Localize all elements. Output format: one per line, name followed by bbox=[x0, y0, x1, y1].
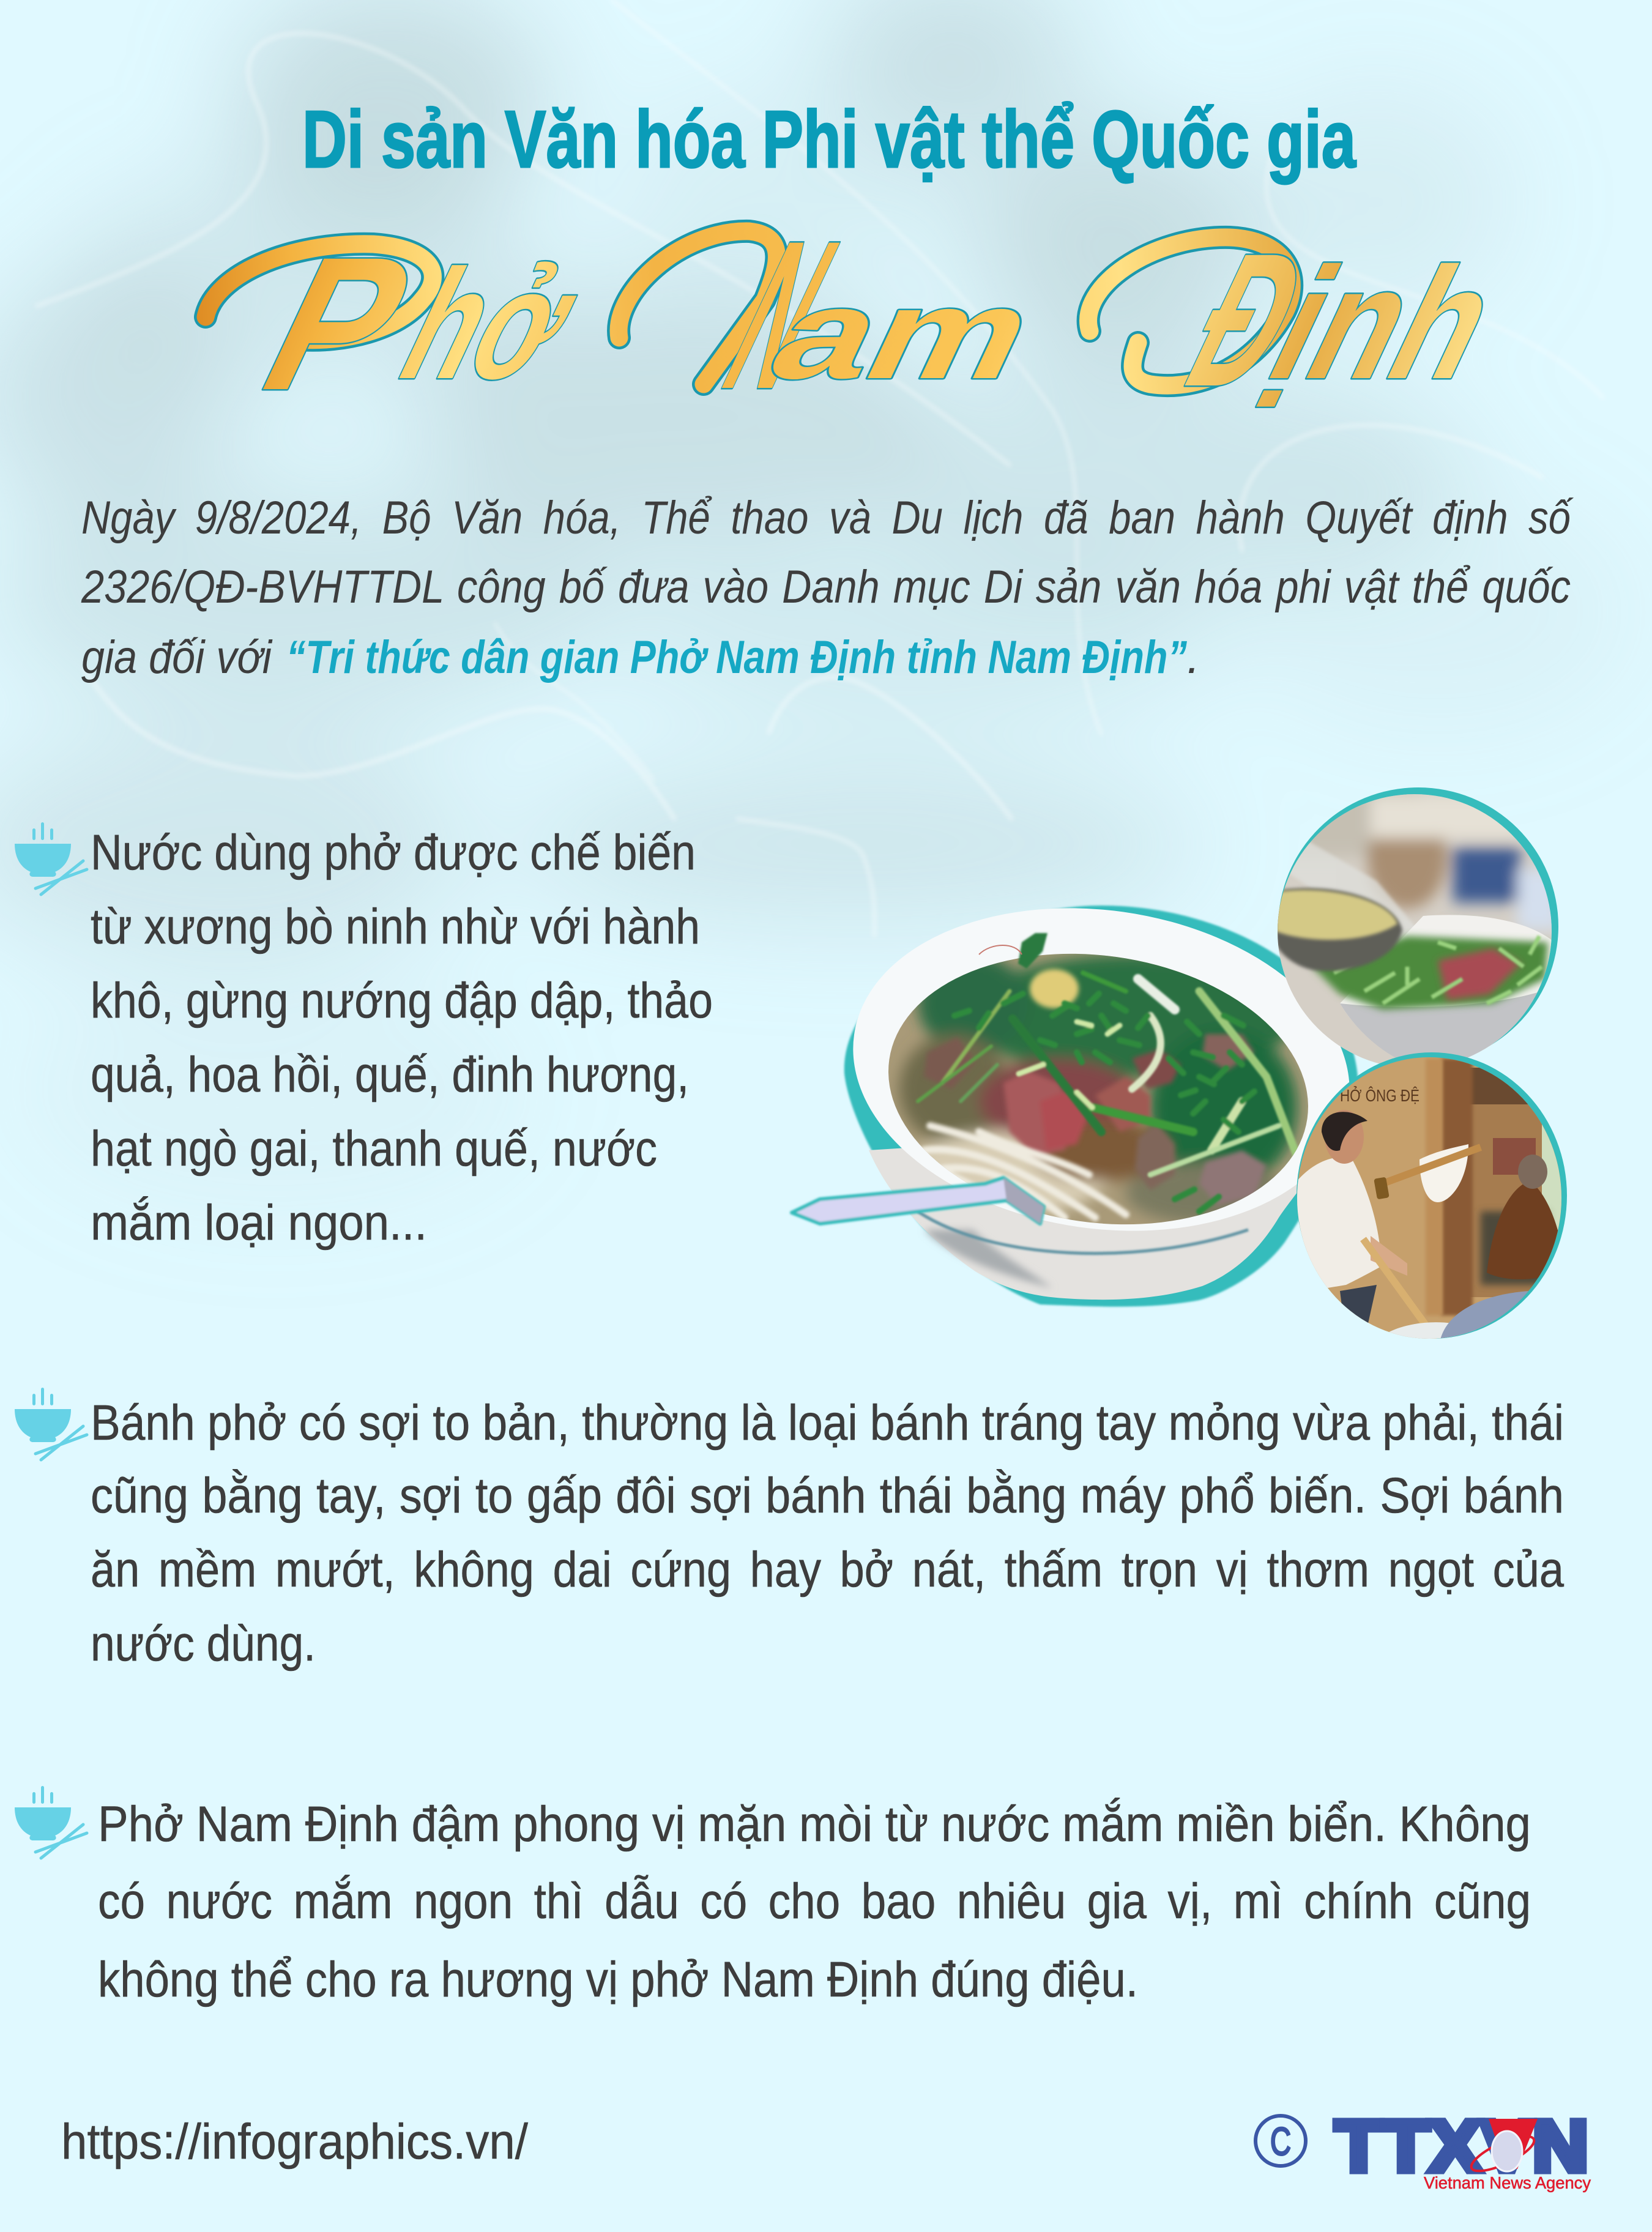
herb leaf on rim bbox=[1018, 933, 1047, 969]
swash fill bbox=[206, 231, 1292, 385]
script letters: am bbox=[749, 262, 1060, 406]
TTXVN logo: Vietnam News Agency bbox=[1424, 2173, 1591, 2192]
spoon bbox=[792, 1178, 1044, 1224]
text block: fish sauce: không thể cho ra hương vị phở Nam Định đúng điệu. bbox=[98, 1952, 1138, 2007]
highlighted phrase: “Tri thức dân gian Phở Nam Định tỉnh Nam Định” bbox=[286, 631, 1187, 683]
text block: broth: Nước dùng phở được chế biến bbox=[91, 825, 696, 880]
photo: bowl of pho bbox=[792, 877, 1371, 1307]
rim bbox=[832, 877, 1371, 1262]
shop sign: PHỞ ÔNG ĐỆ bbox=[1331, 1085, 1419, 1105]
text block: broth: quả, hoa hồi, quế, đinh hương, bbox=[91, 1047, 689, 1103]
bowl body bbox=[869, 1120, 1346, 1300]
text block: fish sauce: Phở Nam Định đậm phong vị mặn mòi từ nước mắm miền biển. Không bbox=[98, 1796, 1531, 1852]
script letters: N bbox=[671, 197, 867, 433]
intro paragraph bbox=[81, 492, 1574, 683]
icon: bowl with chopsticks 2 bbox=[15, 1388, 87, 1460]
script letters: Đ bbox=[1128, 215, 1336, 426]
TTXVN logo: TTXVN bbox=[1335, 2106, 1588, 2187]
source url: https://infographics.vn/ bbox=[61, 2114, 528, 2170]
photo: ladling broth bbox=[1273, 787, 1566, 1071]
intro paragraph: . bbox=[1187, 631, 1200, 683]
text block: noodles bbox=[91, 1395, 1564, 1672]
ladle bbox=[1276, 888, 1402, 971]
customer bbox=[1487, 1181, 1563, 1279]
script letters: hở bbox=[376, 237, 605, 411]
filter cloth bbox=[1419, 1144, 1468, 1202]
text block: broth: khô, gừng nướng đập dập, thảo bbox=[91, 973, 713, 1029]
title: Di sản Văn hóa Phi vật thể Quốc gia bbox=[302, 94, 1356, 184]
bowl bbox=[1340, 915, 1552, 1047]
text block: broth bbox=[91, 825, 713, 1251]
teal cutout outline bbox=[844, 906, 1358, 1307]
icon: bowl with chopsticks 1 bbox=[15, 822, 87, 895]
intro paragraph: gia đối với bbox=[81, 631, 273, 683]
script letters: ịnh bbox=[1245, 234, 1526, 412]
copyright logo bbox=[1256, 2116, 1306, 2166]
copyright logo: C bbox=[1270, 2119, 1291, 2163]
broth and toppings bbox=[881, 948, 1315, 1230]
man bbox=[1297, 1157, 1381, 1291]
wooden column bbox=[1441, 1058, 1473, 1315]
pot bbox=[1371, 1322, 1493, 1352]
text block: broth: từ xương bò ninh nhừ với hành bbox=[91, 899, 700, 954]
photo: filtering broth bbox=[1297, 1052, 1567, 1339]
script letters: P bbox=[233, 218, 445, 430]
text block: broth: hạt ngò gai, thanh quế, nước bbox=[91, 1121, 657, 1177]
script title: Phở Nam Định bbox=[206, 197, 1544, 433]
swash outline bbox=[206, 231, 1292, 385]
text block: broth: mắm loại ngon... bbox=[91, 1195, 427, 1251]
icon: bowl with chopsticks 3 bbox=[15, 1786, 87, 1858]
text block: fish sauce bbox=[98, 1796, 1531, 2007]
text block: noodles: nước dùng. bbox=[91, 1616, 316, 1672]
